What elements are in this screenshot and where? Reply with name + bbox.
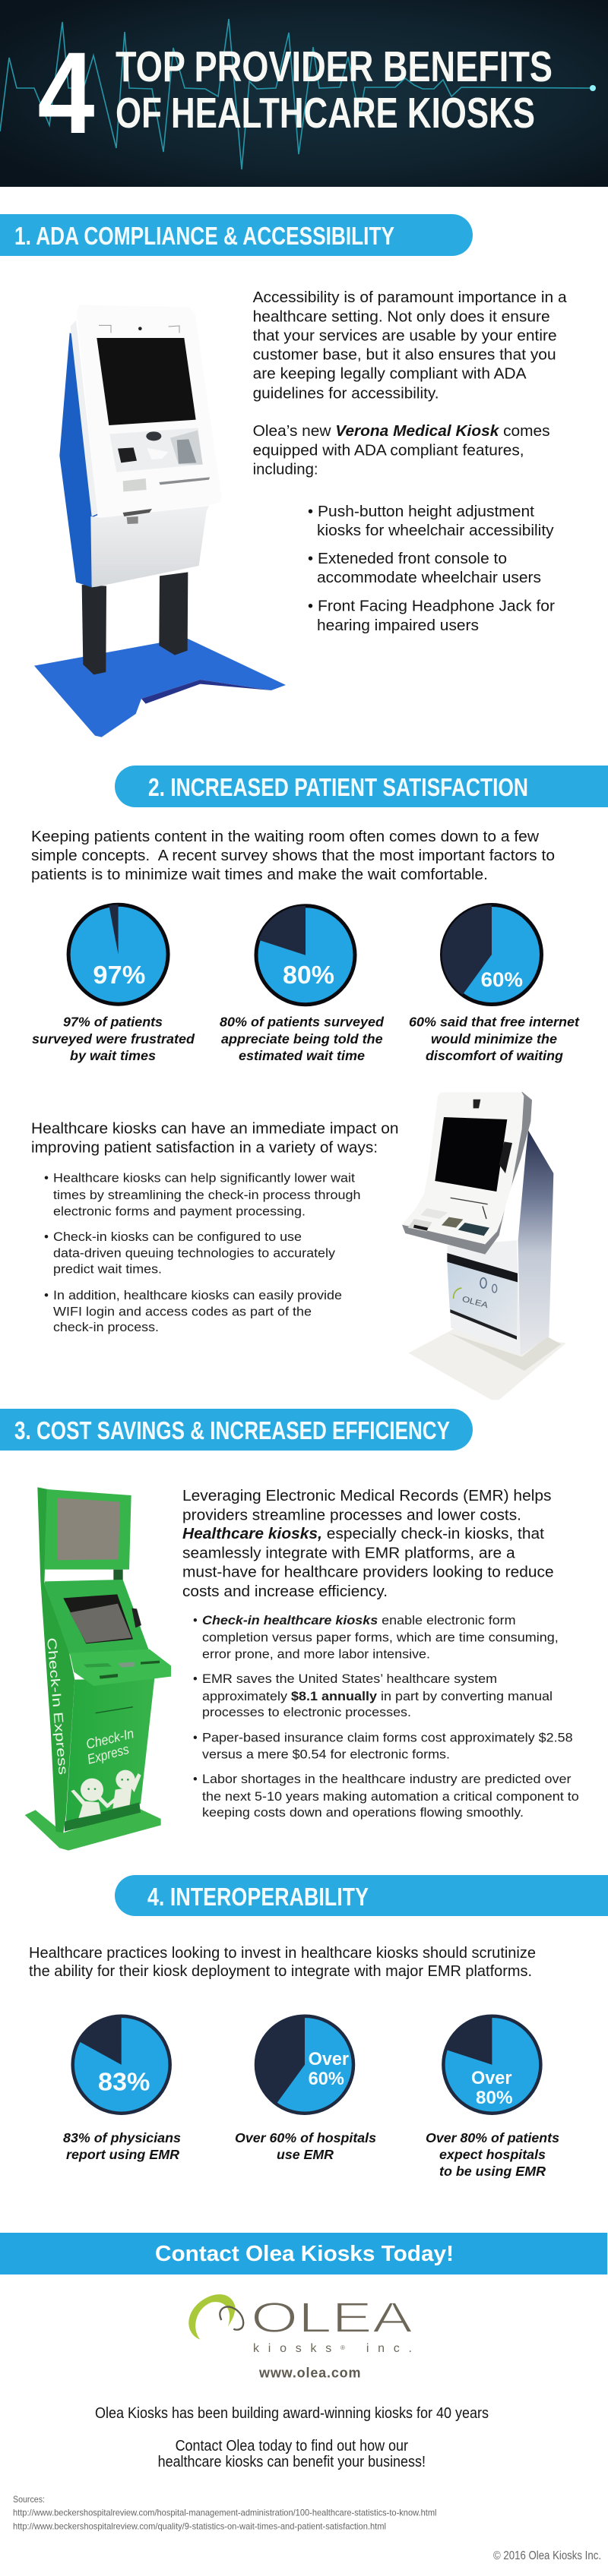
website: www.olea.com xyxy=(258,2366,360,2381)
pie chart: over 80%: 80% xyxy=(476,2088,512,2108)
pie chart: over 80% xyxy=(443,2016,540,2114)
pie chart: over 60%: Over xyxy=(309,2049,349,2069)
bullet list: cost savings: completion versus paper forms, which are time consuming, xyxy=(202,1631,559,1645)
kiosk side label: Check-In Express xyxy=(44,1637,71,1776)
sources: Sources: xyxy=(13,2494,45,2505)
caption: over 80% xyxy=(426,2130,559,2179)
bullet list: cost savings: Check-in healthcare kiosks enable electronic form xyxy=(202,1614,516,1627)
pie chart: over 60%: 60% xyxy=(309,2069,344,2089)
text block: EMR intro: seamlessly integrate with EMR platforms, are a xyxy=(182,1545,516,1562)
pie chart: 97% xyxy=(68,904,168,1004)
text block: accessibility intro: guidelines for accessibility. xyxy=(253,386,439,402)
text block: EMR intro: Leveraging Electronic Medical Records (EMR) helps xyxy=(182,1488,552,1504)
caption: over 60%: Over 60% of hospitals xyxy=(235,2130,376,2145)
icon: two children xyxy=(71,1770,141,1818)
caption: 80%: appreciate being told the xyxy=(221,1031,383,1046)
text block: EMR intro: providers streamline processes and lower costs. xyxy=(182,1507,521,1523)
bullet list: cost savings: Labor shortages in the healthcare industry are predicted over xyxy=(202,1773,572,1786)
text block: EMR intro: Healthcare kiosks, especially check-in kiosks, that xyxy=(182,1526,544,1542)
bullet list: satisfaction improvements xyxy=(44,1171,361,1334)
bullet list: cost savings: • xyxy=(193,1773,198,1786)
sources: http://www.beckershospitalreview.com/quality/9-statistics-on-wait-times-and-patient-satisfaction.html xyxy=(13,2521,386,2532)
text block: contact message xyxy=(95,2405,489,2470)
big numeral 4: 4 xyxy=(38,28,94,158)
kiosk logo: OLEA xyxy=(461,1295,490,1311)
text block: contact message: healthcare kiosks can benefit your business! xyxy=(158,2454,426,2470)
text block: Verona kiosk: Olea’s new Verona Medical Kiosk comes xyxy=(253,423,550,440)
bullet list: cost savings: keeping costs down and operations flowing smoothly. xyxy=(202,1806,524,1820)
caption: over 80%: expect hospitals xyxy=(439,2147,546,2162)
caption: 97%: 97% of patients xyxy=(63,1015,163,1030)
pie chart: 80% xyxy=(256,906,355,1005)
text block: EMR intro: costs and increase efficiency. xyxy=(182,1583,388,1600)
text block: patient satisfaction intro: Keeping patients content in the waiting room often comes down to a few xyxy=(31,829,540,845)
kiosk front label: Express xyxy=(86,1741,131,1767)
icon: blue Verona medical kiosk xyxy=(34,305,286,737)
text block: Verona kiosk: equipped with ADA compliant features, xyxy=(253,443,524,459)
title xyxy=(116,43,553,137)
bullet list: satisfaction improvements: Healthcare kiosks can help significantly lower wait xyxy=(53,1171,355,1185)
text block: interoperability intro: Healthcare practices looking to invest in healthcare kiosks should scrutinize xyxy=(29,1945,536,1962)
caption: over 80%: Over 80% of patients xyxy=(426,2130,559,2145)
text block: immediate impact: Healthcare kiosks can have an immediate impact on xyxy=(31,1121,398,1138)
section 4 heading xyxy=(115,1875,608,1916)
bullet list: cost savings: EMR saves the United States’ healthcare system xyxy=(202,1672,497,1686)
header banner xyxy=(0,0,608,187)
pie chart: 60% xyxy=(442,905,541,1004)
contact banner xyxy=(0,2233,607,2275)
text block: Verona kiosk xyxy=(253,423,550,478)
text block: accessibility intro: healthcare setting. Not only does it ensure xyxy=(253,309,550,326)
caption: 80%: 80% of patients surveyed xyxy=(220,1015,384,1030)
text block: interoperability intro xyxy=(29,1945,536,1980)
caption: 83%: 83% of physicians xyxy=(63,2130,181,2145)
bullet list: cost savings: the next 5-10 years making automation a critical component to xyxy=(202,1790,579,1804)
text block: immediate impact: improving patient satisfaction in a variety of ways: xyxy=(31,1140,378,1157)
caption: 60%: 60% said that free internet xyxy=(409,1015,580,1030)
caption: 97%: by wait times xyxy=(70,1048,156,1063)
text block: accessibility intro xyxy=(253,289,568,402)
section 1 heading: 1. ADA COMPLIANCE & ACCESSIBILITY xyxy=(14,222,394,250)
bullet list: cost savings: versus a mere $0.54 for electronic forms. xyxy=(202,1748,450,1762)
pie chart: 97%: 97% xyxy=(93,961,145,989)
text block: accessibility intro: Accessibility is of paramount importance in a xyxy=(253,289,568,306)
contact banner: Contact Olea Kiosks Today! xyxy=(155,2242,454,2266)
caption: 83%: report using EMR xyxy=(66,2147,179,2162)
pie chart: 83% xyxy=(73,2016,170,2114)
section 3 heading: 3. COST SAVINGS & INCREASED EFFICIENCY xyxy=(14,1416,450,1444)
bullet list: satisfaction improvements: • xyxy=(44,1171,49,1185)
icon: white Olea check-in kiosk xyxy=(402,1091,566,1400)
logo: Olea Kiosks xyxy=(188,2293,413,2355)
text block: accessibility intro: customer base, but it also ensures that you xyxy=(253,346,556,363)
caption: over 80%: to be using EMR xyxy=(439,2164,546,2179)
bullet list: cost savings: • xyxy=(193,1672,198,1686)
heartbeat line xyxy=(0,19,596,169)
text block: interoperability intro: the ability for their kiosk deployment to integrate with major EMR platforms. xyxy=(29,1963,532,1980)
logo tagline: kiosks xyxy=(253,2342,331,2355)
kiosk front label: Check-In xyxy=(84,1725,135,1752)
bullet list: cost savings xyxy=(193,1614,579,1820)
text block: Verona kiosk: including: xyxy=(253,462,318,478)
logo wordmark: OLEA xyxy=(251,2293,413,2342)
bullet list: cost savings: • xyxy=(193,1732,198,1745)
text block: immediate impact xyxy=(31,1121,398,1157)
section 2 heading xyxy=(115,766,608,807)
bullet list: satisfaction improvements: times by streamlining the check-in process through xyxy=(53,1188,361,1202)
logo tagline: ® xyxy=(340,2344,345,2351)
text block: accessibility intro: that your services are usable by your entire xyxy=(253,328,557,345)
bullet list: satisfaction improvements: data-driven queuing technologies to accurately xyxy=(53,1246,336,1261)
bullet list: cost savings: processes to electronic processes. xyxy=(202,1706,411,1719)
bullet list: satisfaction improvements: predict wait times. xyxy=(53,1262,162,1277)
bullet list: ADA features: Front Facing Headphone Jack for xyxy=(318,598,555,615)
section 1 heading xyxy=(0,214,473,256)
pie chart: 60%: 60% xyxy=(481,968,523,991)
bullet list: satisfaction improvements: In addition, healthcare kiosks can easily provide xyxy=(53,1288,342,1302)
bullet list: ADA features: accommodate wheelchair users xyxy=(317,570,541,586)
caption: over 60%: use EMR xyxy=(277,2147,334,2162)
sources xyxy=(13,2494,436,2532)
caption: 60% xyxy=(409,1015,580,1063)
text block: accessibility intro: are keeping legally compliant with ADA xyxy=(253,365,527,382)
caption: 97% xyxy=(32,1015,195,1063)
text block: patient satisfaction intro: patients is to minimize wait times and make the wait comfortable. xyxy=(31,867,488,883)
bullet list: ADA features: Exteneded front console to xyxy=(318,551,507,567)
text block: contact message: Olea Kiosks has been building award-winning kiosks for 40 years xyxy=(95,2405,489,2422)
pie chart: over 60% xyxy=(256,2016,353,2114)
bullet list: satisfaction improvements: • xyxy=(44,1230,49,1244)
caption: 80%: estimated wait time xyxy=(239,1048,365,1063)
bullet list: cost savings: error prone, and more labor intensive. xyxy=(202,1648,430,1662)
bullet list: ADA features: • xyxy=(308,551,313,567)
bullet list: satisfaction improvements: electronic forms and payment processing. xyxy=(53,1204,306,1219)
text block: contact message: Contact Olea today to find out how our xyxy=(176,2438,408,2454)
caption: 60%: discomfort of waiting xyxy=(426,1048,563,1063)
pie chart: 80%: 80% xyxy=(283,961,334,989)
bullet list: ADA features xyxy=(308,504,555,634)
kiosk front label xyxy=(84,1725,135,1767)
bullet list: satisfaction improvements: • xyxy=(44,1288,49,1302)
section 3 heading xyxy=(0,1409,473,1451)
bullet list: ADA features: kiosks for wheelchair accessibility xyxy=(317,522,554,539)
bullet list: satisfaction improvements: Check-in kiosks can be configured to use xyxy=(53,1230,302,1244)
bullet list: ADA features: Push-button height adjustment xyxy=(318,504,534,520)
icon: green Check-In Express kiosk xyxy=(25,1487,171,1851)
bullet list: ADA features: • xyxy=(308,598,313,615)
bullet list: satisfaction improvements: check-in process. xyxy=(53,1320,159,1334)
sources: http://www.beckershospitalreview.com/hospital-management-administration/100-healthcare-statistics-to-know.html xyxy=(13,2508,436,2518)
bullet list: cost savings: approximately $8.1 annually in part by converting manual xyxy=(202,1690,553,1703)
bullet list: ADA features: • xyxy=(308,504,313,520)
logo swoosh xyxy=(188,2294,243,2340)
bullet list: cost savings: Paper-based insurance claim forms cost approximately $2.58 xyxy=(202,1732,573,1745)
bullet list: ADA features: hearing impaired users xyxy=(317,617,479,634)
section 4 heading: 4. INTEROPERABILITY xyxy=(147,1883,369,1911)
caption: 60%: would minimize the xyxy=(431,1031,557,1046)
caption: 97%: surveyed were frustrated xyxy=(32,1031,195,1046)
caption: 83% xyxy=(63,2130,181,2162)
bullet list: cost savings: • xyxy=(193,1614,198,1627)
text block: patient satisfaction intro: simple concepts. A recent survey shows that the most important factors to xyxy=(31,848,555,864)
bullet list: satisfaction improvements: WIFI login and access codes as part of the xyxy=(53,1305,312,1319)
caption: 80% xyxy=(220,1015,384,1063)
caption: over 60% xyxy=(235,2130,376,2162)
logo tagline: inc. xyxy=(354,2342,412,2355)
text block: EMR intro: must-have for healthcare providers looking to reduce xyxy=(182,1564,554,1581)
pie chart: over 80%: Over xyxy=(471,2068,512,2088)
text block: patient satisfaction intro xyxy=(31,829,555,883)
text block: EMR intro xyxy=(182,1488,554,1600)
pie chart: 83%: 83% xyxy=(98,2068,150,2096)
